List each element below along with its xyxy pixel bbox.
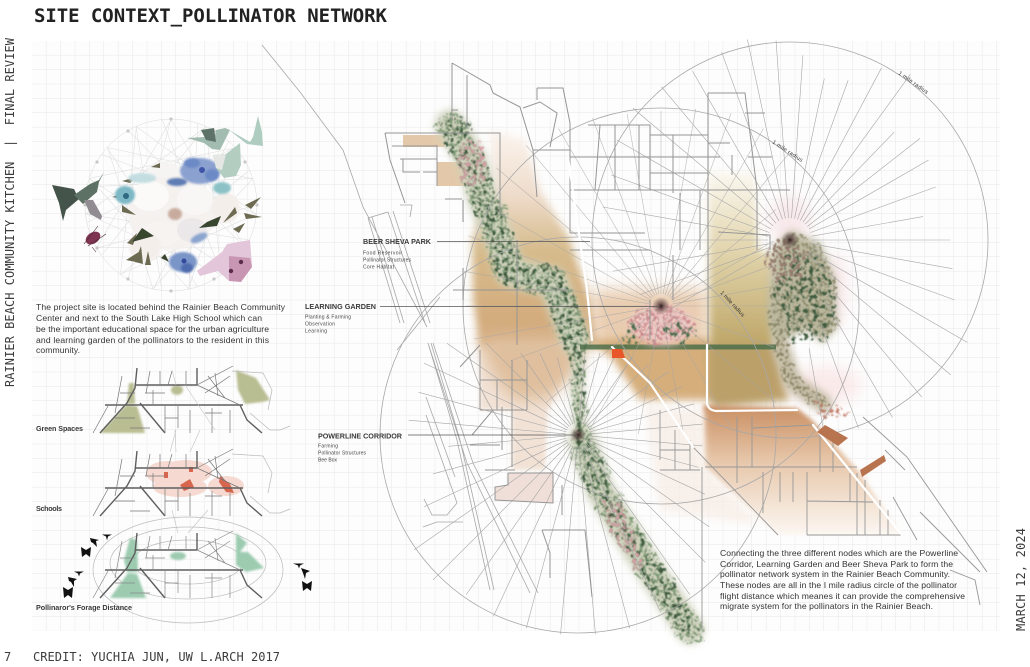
text block: network description: pollinator network system in the Rainier Beach Community.	[720, 569, 950, 579]
radial flight lines: Powerline Corridor	[409, 343, 709, 634]
hub dots	[570, 231, 799, 443]
foliage leaves	[112, 163, 262, 265]
green areas	[100, 370, 270, 433]
radial flight lines: Beer Sheva Park	[603, 39, 968, 428]
callout: Learning Garden: LEARNING GARDEN	[305, 302, 376, 311]
text block: network description: Corridor, Learning Garden and Beer Sheva Park to form the	[720, 559, 953, 569]
green corridor band	[580, 344, 776, 350]
radial flight lines: Learning Garden	[464, 109, 790, 434]
text block: network description: flight distance which meanes it can provide the comprehensive	[720, 591, 965, 601]
label: green spaces: Green Spaces	[36, 424, 83, 433]
callout: Beer Sheva Park	[363, 237, 432, 270]
map: site network plan	[262, 39, 988, 634]
road network	[100, 368, 262, 433]
white blossom	[128, 162, 240, 261]
text block: network description: migrate system for the pollinators in the Rainier Beach.	[720, 601, 933, 611]
label: pollinator forage distance: Pollinaror's Forage Distance	[36, 603, 132, 612]
title: SITE CONTEXT_POLLINATOR NETWORK	[34, 5, 388, 27]
icon: butterfly three	[213, 143, 241, 178]
soft foliage base	[450, 125, 837, 630]
callout: Learning Garden: Observation	[305, 322, 335, 328]
label leader lines	[380, 242, 660, 435]
callout: Powerline Corridor: Pollinator Structures	[318, 450, 366, 456]
network mesh circle	[60, 92, 284, 318]
street network	[262, 45, 987, 630]
map: schools layer	[93, 449, 290, 516]
text block: project site description: Center and next to the South Lake High School which can	[36, 313, 262, 323]
panel: flower and pollinator collage	[52, 92, 284, 318]
page number: 7	[4, 650, 11, 664]
text block: network description	[720, 548, 965, 611]
icon: bee	[83, 226, 106, 252]
icon: hummingbird	[52, 172, 104, 221]
site marker	[612, 349, 625, 358]
callout: Learning Garden: Planting & Farming	[305, 314, 351, 320]
callout: Beer Sheva Park: Core Habitat	[363, 264, 395, 270]
callout: Learning Garden	[305, 302, 376, 334]
text block: network description: Connecting the three different nodes which are the Powerline	[720, 548, 958, 558]
radius label north: 1 mile radius	[897, 71, 929, 96]
painted wash layers	[403, 130, 902, 535]
callout: Powerline Corridor: Farming	[318, 444, 338, 450]
icon: butterfly one	[187, 128, 230, 150]
one mile radius circles	[380, 42, 988, 633]
credit: CREDIT: YUCHIA JUN, UW L.ARCH 2017	[33, 650, 280, 664]
radius label south: 1 mile radius	[719, 290, 746, 319]
school catchment areas	[146, 460, 244, 497]
road network	[100, 451, 262, 516]
label: schools: Schools	[36, 504, 62, 513]
icon: pink moth	[197, 240, 252, 282]
foliage: Beer Sheva Park corridor and Powerline corridor	[450, 125, 850, 630]
text block: project site description: community.	[36, 345, 80, 355]
brown site buildings	[817, 425, 886, 477]
callout: Learning Garden: Learning	[305, 328, 327, 334]
text block: project site description	[36, 302, 286, 355]
callout: Powerline Corridor: Bee Box	[318, 458, 338, 464]
map: pollinator forage distance layer	[63, 517, 312, 623]
pink blossoms	[458, 138, 850, 572]
foliage: Learning Garden node	[623, 305, 694, 345]
mottled mid green	[450, 125, 837, 630]
school sites	[164, 467, 234, 493]
vertical project label: RAINIER BEACH COMMUNITY KITCHEN | FINAL REVIEW	[3, 37, 17, 387]
text block: project site description: and learning garden of the pollinators to the resident in this	[36, 335, 269, 345]
mottled dark green	[450, 125, 835, 630]
road network	[93, 531, 262, 598]
text block: network description: These nodes are all in the I mile radius circle of the pollinator	[720, 580, 957, 590]
connecting lines between layers	[170, 370, 215, 533]
forage ellipses	[93, 517, 283, 623]
radius label middle: 1 mile radius	[771, 140, 804, 164]
icon: butterfly two	[229, 116, 263, 146]
callout: Beer Sheva Park: BEER SHEVA PARK	[363, 237, 432, 246]
callout: Powerline Corridor: POWERLINE CORRIDOR	[318, 432, 403, 440]
map: green spaces layer	[93, 366, 290, 433]
callout: Beer Sheva Park: Pollinator Structures	[363, 258, 412, 264]
white main roads	[568, 157, 902, 535]
callout: Beer Sheva Park: Food Reservoir	[363, 250, 402, 256]
text block: project site description: The project site is located behind the Rainier Beach Community	[36, 302, 286, 312]
vertical date: MARCH 12, 2024	[1014, 528, 1028, 631]
icons: pollinator silhouettes	[63, 534, 312, 598]
text block: project site description: be the important educational space for the urban agriculture	[36, 324, 269, 334]
blue flowers	[115, 158, 231, 273]
forage green areas	[110, 533, 264, 598]
callout: Powerline Corridor	[318, 432, 403, 464]
